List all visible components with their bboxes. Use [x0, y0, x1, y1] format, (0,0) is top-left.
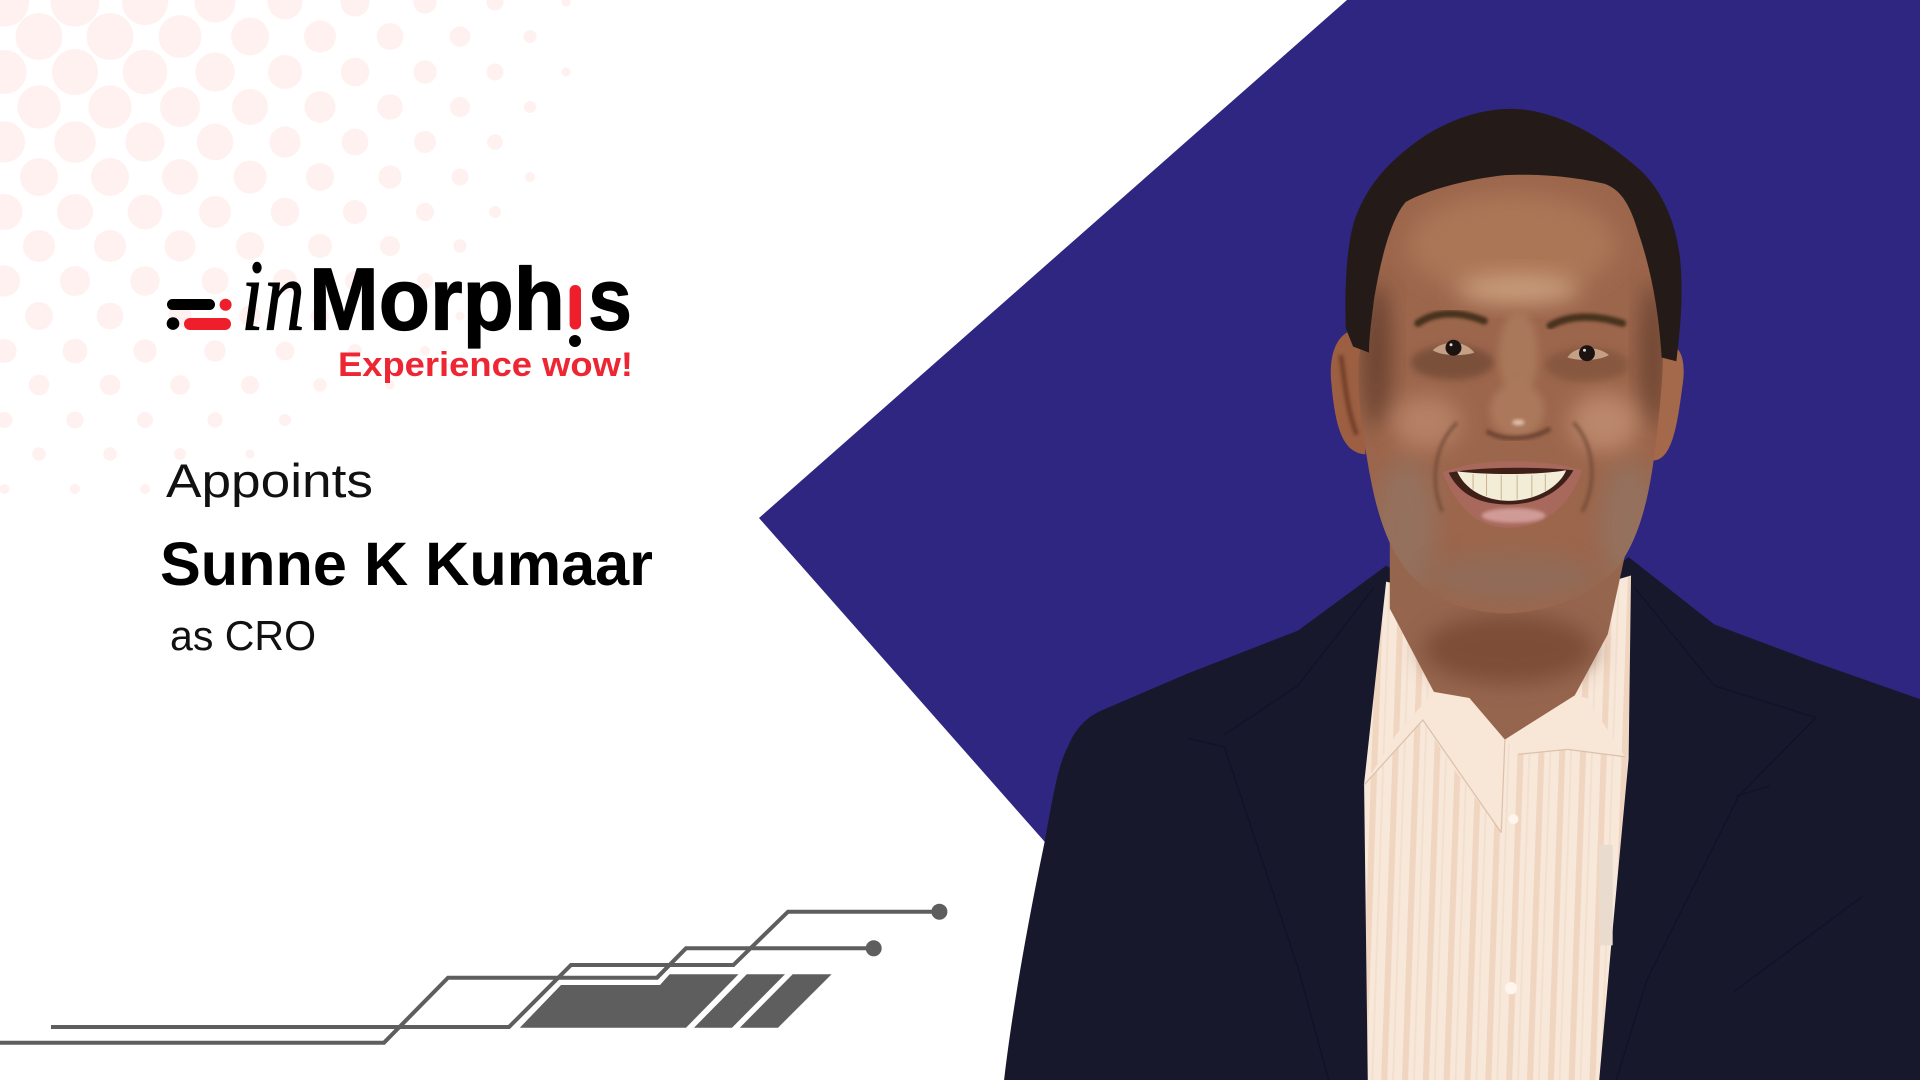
forehead highlight [1410, 194, 1614, 286]
nose [1487, 383, 1550, 438]
neck [1390, 539, 1629, 740]
shirt buttons [1505, 814, 1518, 994]
eyebrows [1418, 314, 1622, 326]
logo icon: bars and dots [167, 299, 232, 330]
circuit line decoration [0, 904, 947, 1043]
navy angular background panel [759, 0, 1920, 1080]
face [1353, 159, 1671, 624]
eye left [1433, 340, 1474, 356]
logo wordmark: s [588, 250, 632, 348]
shirt [1364, 576, 1631, 1080]
temple shading [1362, 282, 1391, 429]
logo wordmark: in [241, 240, 305, 352]
eye right [1567, 345, 1609, 361]
shirt pocket shadow [1599, 845, 1613, 945]
neck shadow [1423, 615, 1594, 683]
lower face grey tone [1376, 462, 1437, 583]
text: Sunne K Kumaar: Sunne K Kumaar [160, 530, 653, 598]
circuit node lower [866, 940, 882, 956]
circuit line lower [0, 948, 870, 1043]
circuit node upper [931, 904, 947, 920]
logo wordmark: Morph [309, 250, 565, 348]
smile folds [1435, 422, 1457, 512]
lapel details [1188, 588, 1862, 1080]
portrait of man in dark blazer [1004, 109, 1920, 1080]
background halftone dots [0, 0, 570, 494]
text: as CRO: as CRO [170, 612, 316, 659]
hair [1345, 109, 1682, 361]
jacket [1004, 557, 1920, 1080]
teeth dividers [1473, 474, 1545, 500]
logo: inMorphis [167, 240, 633, 384]
cheeks [1392, 396, 1461, 449]
logo wordmark [241, 240, 632, 352]
mouth [1442, 461, 1582, 528]
collar [1364, 692, 1625, 833]
circuit line upper [51, 912, 935, 1027]
text: Appoints: Appoints [166, 454, 373, 507]
ears [1331, 330, 1684, 460]
circuit blocks [520, 974, 832, 1028]
logo tagline: Experience wow! [338, 346, 633, 384]
collar edges [1364, 720, 1625, 833]
eye socket shadows [1411, 345, 1494, 380]
brow-ridge highlight [1498, 316, 1538, 385]
